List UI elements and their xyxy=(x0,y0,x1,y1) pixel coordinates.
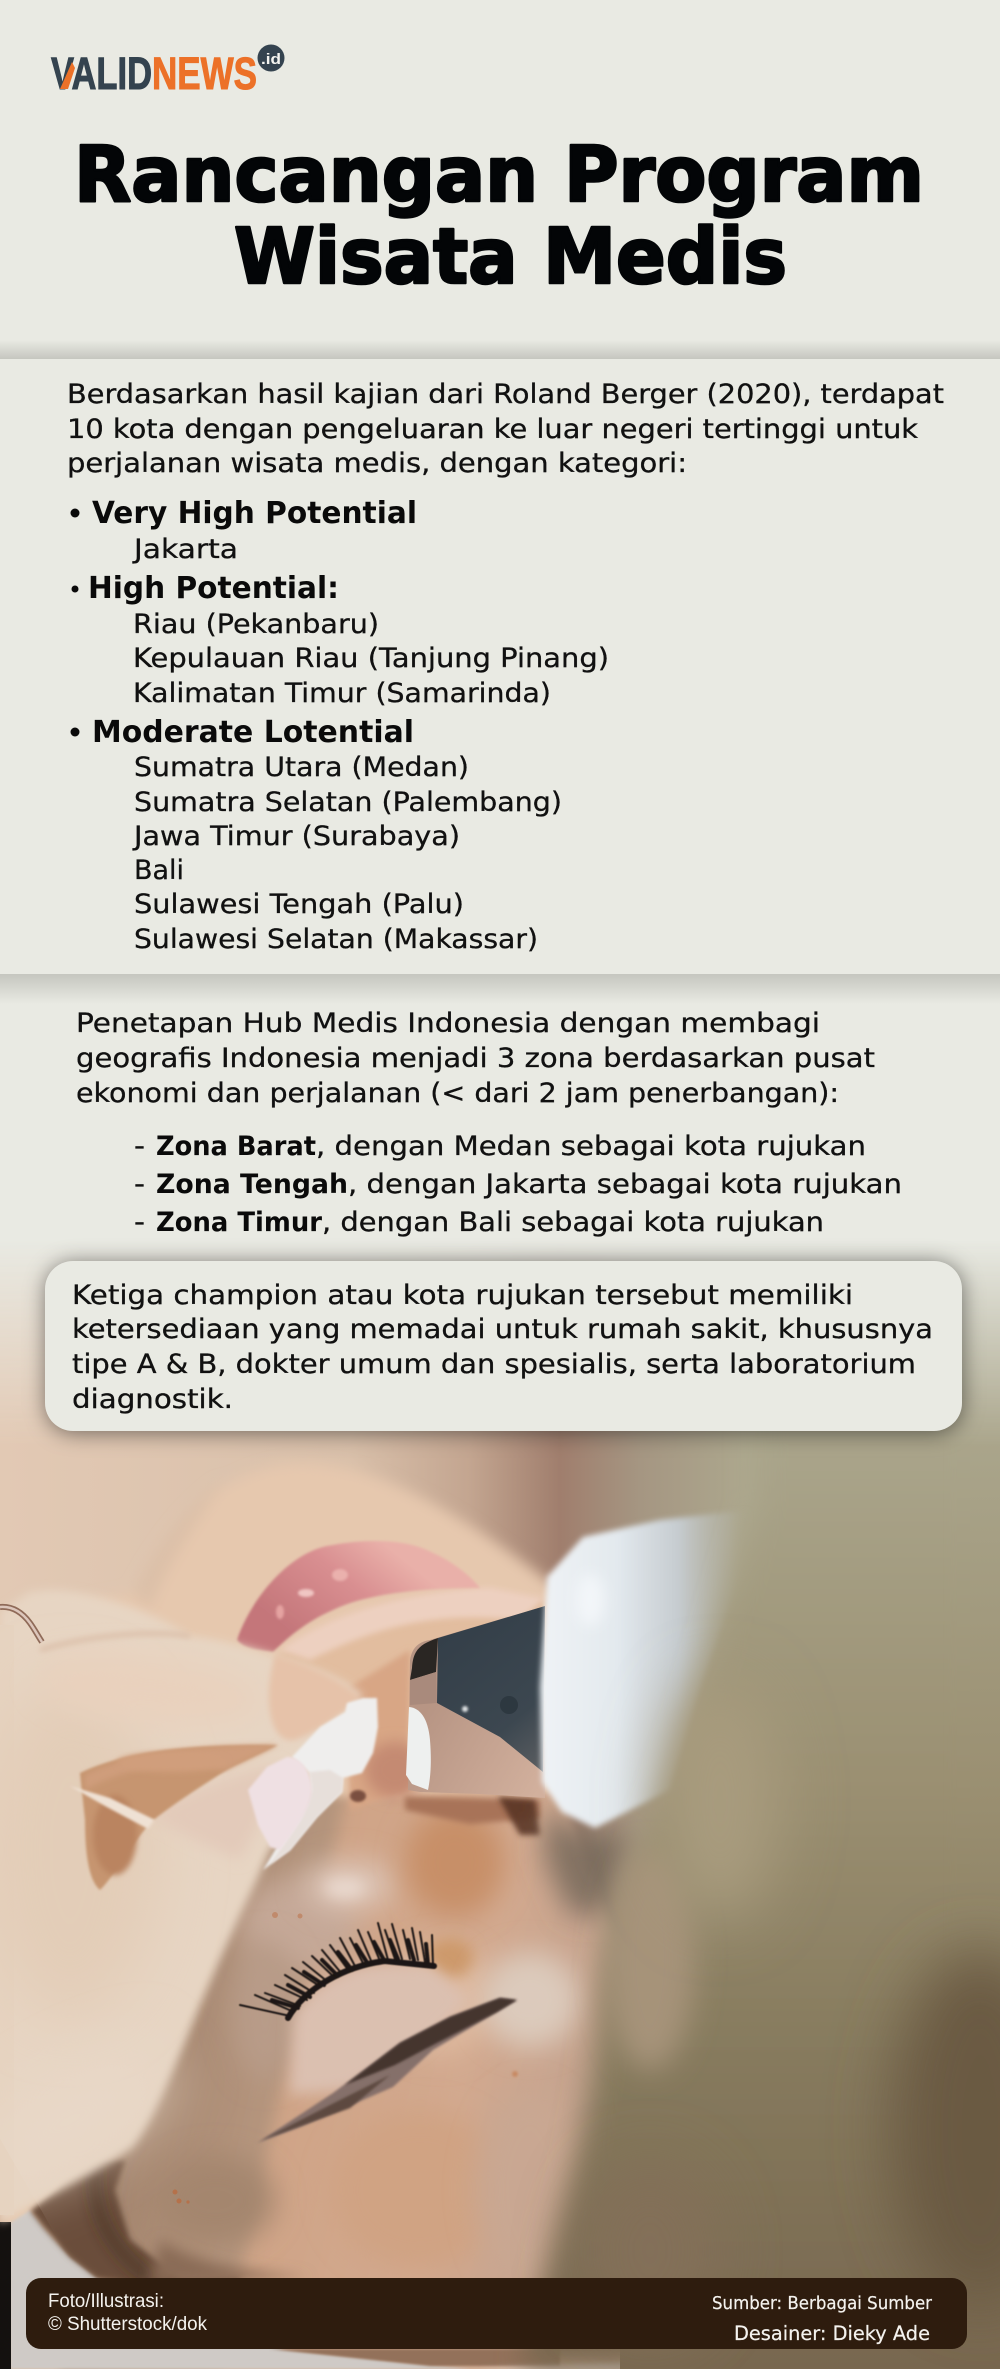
callout: champion cities: diagnostik. xyxy=(72,1384,233,1415)
logo: Validnews.id xyxy=(51,44,284,99)
callout: champion cities: ketersediaan yang memadai untuk rumah sakit, khususnya xyxy=(72,1314,933,1345)
footer credits bar: Desainer: Dieky Ade xyxy=(734,2322,930,2345)
ultrasonic skin scrubber blade xyxy=(406,1606,545,1798)
logo: Validnews.id: VALID xyxy=(51,48,152,99)
callout: champion cities: Ketiga champion atau kota rujukan tersebut memiliki xyxy=(72,1280,853,1311)
footer credits bar: Foto/Illustrasi: xyxy=(48,2290,164,2312)
background photo: facial treatment xyxy=(0,1200,1000,2369)
category: high potential: Kepulauan Riau (Tanjung Pinang) xyxy=(133,643,609,674)
zone list: - xyxy=(134,1207,145,1238)
blurred foreground xyxy=(510,1500,1000,2369)
title xyxy=(74,131,924,302)
eyebrow xyxy=(257,1998,517,2143)
category: moderate potential: Moderate Lotential xyxy=(92,715,414,750)
zone list: , dengan Jakarta sebagai kota rujukan xyxy=(348,1169,902,1200)
thumb nail xyxy=(248,1757,312,1850)
lips and upper skin xyxy=(236,1540,543,1684)
hub paragraph: ekonomi dan perjalanan (< dari 2 jam penerbangan): xyxy=(76,1078,839,1109)
ultrasonic device body xyxy=(536,1512,734,1832)
footer credits bar: © Shutterstock/dok xyxy=(48,2313,207,2335)
hub paragraph: Penetapan Hub Medis Indonesia dengan membagi xyxy=(76,1008,820,1039)
logo: Validnews.id: NEWS xyxy=(152,48,257,99)
zone list: - xyxy=(134,1131,145,1162)
intro paragraph: perjalanan wisata medis, dengan kategori: xyxy=(67,448,687,479)
nose skin xyxy=(345,1650,630,1915)
logo: Validnews.id: .id xyxy=(261,51,281,68)
category: moderate potential: Sumatra Selatan (Palembang) xyxy=(134,787,562,818)
category: moderate potential xyxy=(70,715,562,955)
hair and cloth at bottom left xyxy=(0,2160,640,2369)
information band xyxy=(0,359,1000,974)
cotton foam xyxy=(263,1698,378,1870)
callout box shadow xyxy=(46,1263,962,1433)
intro paragraph xyxy=(67,379,944,479)
zone list: - xyxy=(134,1169,145,1200)
footer credits bar xyxy=(26,2278,967,2349)
category: very high potential: Very High Potential xyxy=(92,496,417,531)
category: high potential: Kalimatan Timur (Samarinda) xyxy=(133,678,551,709)
category: high potential: Riau (Pekanbaru) xyxy=(133,609,379,640)
intro paragraph: Berdasarkan hasil kajian dari Roland Berger (2020), terdapat xyxy=(67,379,944,410)
eyelashes xyxy=(240,1923,434,2018)
hand xyxy=(0,1590,372,2223)
bottom band shadow xyxy=(0,974,1000,1004)
zone list: Zona Barat xyxy=(156,1131,316,1162)
panel: medical hub zones xyxy=(76,1008,902,1238)
category: moderate potential: Jawa Timur (Surabaya) xyxy=(132,821,460,852)
category: very high potential xyxy=(70,496,417,565)
category: moderate potential: Sumatra Utara (Medan) xyxy=(134,752,469,783)
category: moderate potential: Bali xyxy=(134,855,184,886)
hub paragraph: geografis Indonesia menjadi 3 zona berdasarkan pusat xyxy=(76,1043,875,1074)
gap between fingers xyxy=(70,1745,278,1890)
category: high potential: High Potential: xyxy=(88,571,339,606)
face skin xyxy=(0,1466,550,2369)
title: Wisata Medis xyxy=(234,213,787,302)
top band shadow xyxy=(0,340,1000,359)
title: Rancangan Program xyxy=(74,131,924,220)
zone list xyxy=(134,1131,902,1238)
callout: champion cities xyxy=(45,1261,962,1431)
ring xyxy=(0,1607,42,1642)
photo backdrop xyxy=(0,1256,774,2369)
category: very high potential: Jakarta xyxy=(132,534,238,565)
footer credits bar: Sumber: Berbagai Sumber xyxy=(712,2294,933,2314)
closed eye lid xyxy=(290,1963,470,2095)
zone list: , dengan Medan sebagai kota rujukan xyxy=(316,1131,866,1162)
lower face shading xyxy=(60,1790,620,2369)
zone list: Zona Timur xyxy=(156,1207,323,1238)
category: high potential xyxy=(72,571,609,709)
hub paragraph xyxy=(76,1008,875,1109)
intro paragraph: 10 kota dengan pengeluaran ke luar negeri tertinggi untuk xyxy=(67,414,918,445)
zone list: , dengan Bali sebagai kota rujukan xyxy=(322,1207,824,1238)
zone list: Zona Tengah xyxy=(156,1169,348,1200)
callout: champion cities: tipe A & B, dokter umum dan spesialis, serta laboratorium xyxy=(72,1349,916,1380)
category: moderate potential: Sulawesi Selatan (Makassar) xyxy=(134,924,538,955)
panel: ten cities by potential xyxy=(67,379,944,955)
category: moderate potential: Sulawesi Tengah (Palu) xyxy=(134,889,464,920)
